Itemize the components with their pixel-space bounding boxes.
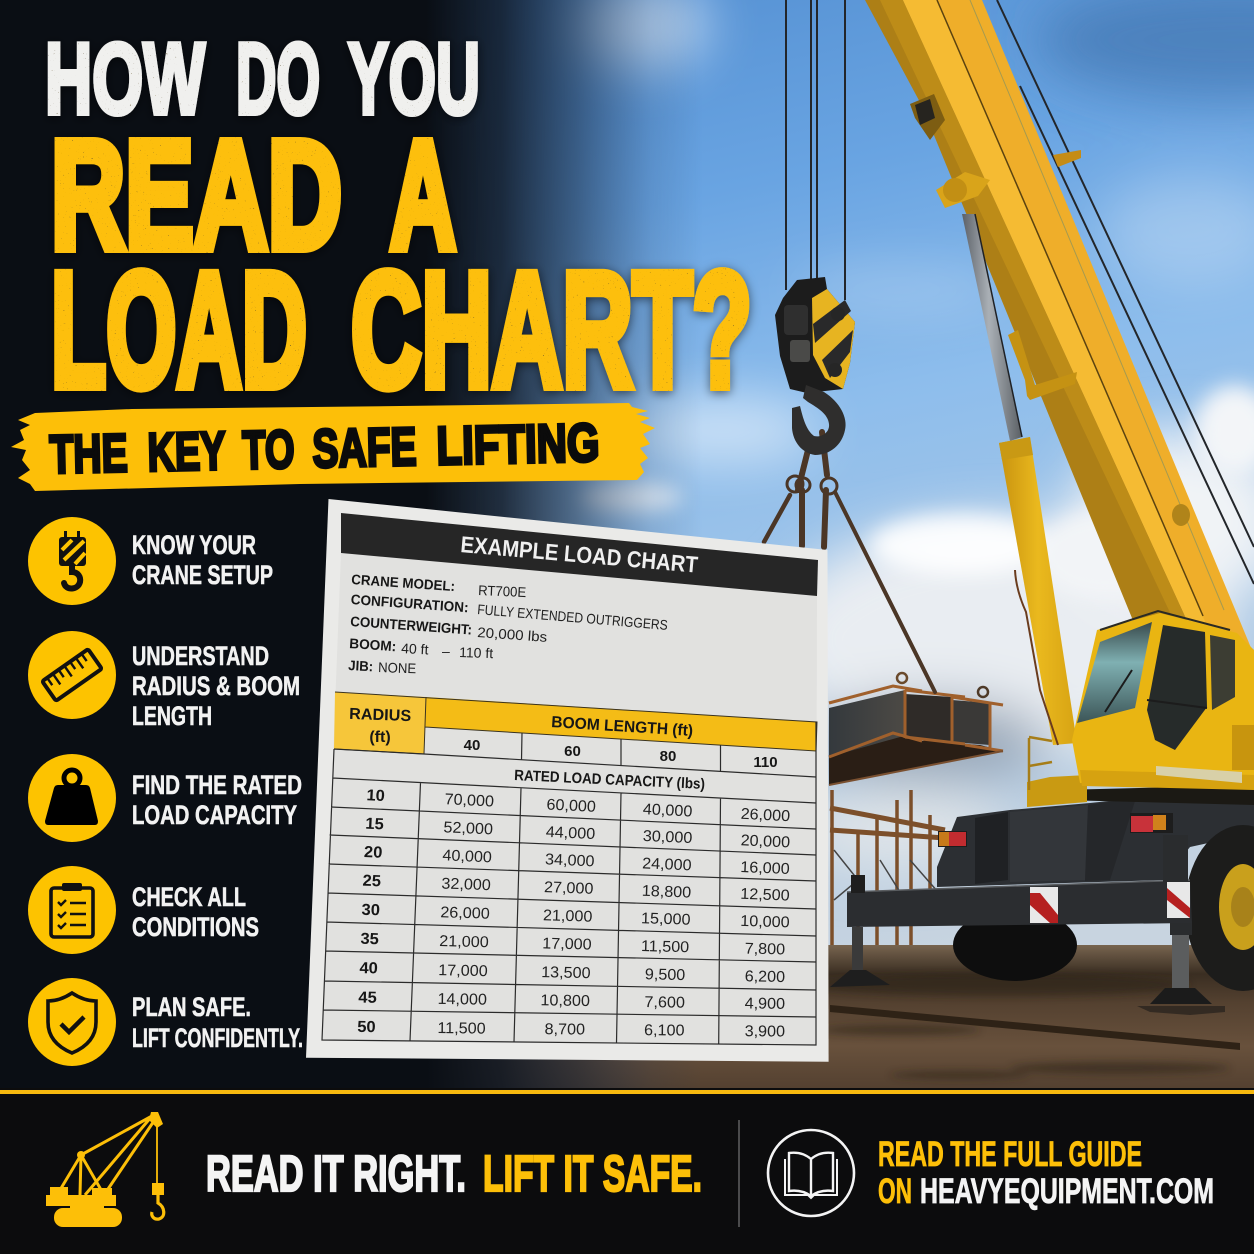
boom 40 column: 26,000 — [440, 904, 490, 923]
boom 80 column: 24,000 — [642, 856, 692, 874]
table grid — [322, 722, 816, 1045]
rear tire — [953, 909, 1077, 981]
boom 110 column: 3,900 — [745, 1023, 785, 1040]
step 4: check all conditions: CONDITIONS — [132, 912, 259, 942]
boom 40 column: 52,000 — [443, 819, 493, 838]
boom 80 column: 30,000 — [642, 828, 693, 847]
cab — [1072, 611, 1254, 790]
crane specifications: CRANE MODEL: — [351, 571, 456, 594]
boom 80 column: 7,600 — [644, 994, 685, 1012]
footer slogan: READ IT RIGHT. — [206, 1145, 466, 1202]
crane specifications: BOOM: — [349, 635, 397, 654]
title line: load chart?: CHART? — [351, 238, 752, 421]
table header: BOOM LENGTH (ft) — [551, 714, 694, 740]
boom 110 column: 26,000 — [740, 806, 791, 825]
hydraulic cylinder — [962, 214, 1077, 745]
chart header band — [341, 513, 818, 596]
boom 40 column: 21,000 — [439, 933, 489, 951]
boom 60 column: 17,000 — [542, 936, 592, 954]
title line: how do you: YOU — [348, 24, 480, 136]
chart inner area — [322, 553, 817, 1045]
footer call to action: ON — [878, 1172, 912, 1211]
boom 40 column: 11,500 — [437, 1020, 486, 1037]
crane boom — [865, 0, 1254, 655]
step 3: find the rated load capacity — [28, 754, 302, 842]
boom 80 column — [641, 801, 693, 1039]
boom 60 column: 60,000 — [546, 797, 596, 816]
step 2: understand radius and boom length: RADIUS & BOOM — [132, 671, 300, 701]
subtitle text: TO — [242, 420, 295, 481]
outrigger beam — [847, 880, 1192, 927]
boom 60 column — [540, 797, 596, 1038]
radius column: 30 — [361, 901, 380, 919]
step 3: find the rated load capacity: FIND THE RATED — [132, 770, 302, 800]
crane truck — [830, 611, 1254, 1015]
subtitle text: KEY — [147, 421, 226, 483]
boom 60 column: 21,000 — [543, 907, 593, 926]
crane specifications: CONFIGURATION: — [350, 591, 469, 615]
boom 110 column: 4,900 — [745, 996, 785, 1013]
bottom bar — [0, 1088, 1254, 1254]
icon: open book in circle — [768, 1130, 854, 1216]
panel: steps list — [28, 517, 303, 1066]
boom 110 column: 12,500 — [740, 886, 790, 904]
railing — [1029, 737, 1052, 790]
icon: clipboard checklist — [51, 883, 93, 937]
background steel structure — [830, 790, 945, 945]
step 1: know your crane setup: CRANE SETUP — [132, 560, 273, 590]
subtitle text: SAFE — [312, 417, 417, 479]
crane specifications — [348, 571, 668, 676]
boom 110 column: 7,800 — [744, 941, 786, 958]
boom 60 column: 8,700 — [544, 1021, 585, 1038]
boom 40 column: 70,000 — [444, 791, 495, 810]
radius column — [357, 786, 385, 1036]
rigging chains — [764, 432, 935, 692]
table header: 40 — [464, 737, 480, 754]
icon: boom clamp bracket top — [910, 94, 990, 208]
step 4: check all conditions — [28, 866, 259, 954]
radius column: 50 — [357, 1018, 376, 1036]
crane specifications: – — [442, 643, 450, 659]
crane wire ropes — [786, 0, 1254, 584]
table header: (ft) — [369, 729, 391, 746]
title line: load chart? — [51, 238, 752, 421]
subtitle brush banner — [11, 403, 655, 491]
boom 40 column: 17,000 — [438, 962, 488, 980]
boom 40 column — [437, 791, 495, 1037]
ground — [300, 945, 1254, 1090]
boom 110 column: 10,000 — [740, 913, 790, 931]
title line: how do you: DO — [236, 24, 320, 136]
step 2: understand radius and boom length: UNDERSTAND — [132, 641, 269, 671]
front tire — [1185, 825, 1254, 991]
title line: read a: READ — [51, 109, 342, 281]
step 5: plan safe lift confidently: LIFT CONFIDENTLY. — [132, 1023, 303, 1053]
chart header band: EXAMPLE LOAD CHART — [460, 531, 699, 578]
boom 80 column: 40,000 — [642, 801, 693, 820]
title line: how do you — [45, 24, 480, 136]
boom 80 column: 15,000 — [641, 910, 691, 929]
crane specifications: RT700E — [478, 582, 527, 600]
crane specifications: COUNTERWEIGHT: — [350, 613, 473, 638]
step 4: check all conditions: CHECK ALL — [132, 882, 246, 912]
footer content — [46, 1112, 1214, 1227]
subtitle text: THE — [49, 423, 128, 485]
boom 80 column: 11,500 — [641, 938, 690, 956]
boom pin — [1053, 150, 1081, 167]
radius column: 20 — [364, 843, 383, 862]
jack stand right — [1137, 835, 1225, 1015]
crane specifications: FULLY EXTENDED OUTRIGGERS — [477, 601, 668, 633]
hook block — [775, 277, 855, 393]
boom 60 column: 10,800 — [540, 992, 590, 1010]
radius column: 10 — [366, 786, 385, 805]
crane specifications: 20,000 lbs — [477, 624, 548, 645]
boom 60 column: 34,000 — [545, 852, 595, 870]
step 1: know your crane setup — [28, 517, 273, 605]
icon: shield check — [48, 993, 96, 1053]
table header — [334, 692, 817, 793]
hook — [792, 385, 846, 455]
step 2: understand radius and boom length: LENGTH — [132, 701, 212, 731]
boom 80 column: 6,100 — [644, 1022, 685, 1039]
boom 60 column: 13,500 — [541, 964, 591, 982]
steel I-beam load — [829, 673, 1003, 785]
jack stand left — [830, 875, 890, 987]
subtitle text: LIFTING — [436, 413, 600, 476]
radius column: 45 — [358, 989, 377, 1007]
table header: 80 — [660, 748, 676, 765]
footer slogan: LIFT IT SAFE. — [483, 1145, 702, 1202]
step 5: plan safe lift confidently — [28, 978, 303, 1066]
tail lights — [938, 813, 1173, 847]
chart card — [306, 499, 829, 1062]
icon: crane silhouette — [46, 1112, 164, 1227]
boom 60 column: 27,000 — [544, 879, 594, 898]
ground plank — [830, 1005, 1240, 1050]
table header: 110 — [753, 754, 778, 771]
icon: crane hook — [59, 531, 86, 589]
step 5: plan safe lift confidently: PLAN SAFE. — [132, 992, 251, 1022]
title line: read a: A — [390, 109, 456, 281]
crane specifications: 110 ft — [459, 644, 494, 661]
radius column: 40 — [359, 959, 378, 977]
reflective chevrons — [1030, 882, 1190, 923]
table values — [357, 786, 791, 1040]
truck body — [937, 795, 1254, 887]
boom 80 column: 18,800 — [641, 883, 692, 901]
title line: how do you: HOW — [45, 24, 205, 136]
boom 110 column — [740, 806, 791, 1040]
title line: load chart?: LOAD — [51, 238, 307, 421]
chassis yellow base — [1027, 775, 1087, 807]
icon: ruler — [42, 649, 102, 701]
boom 40 column: 32,000 — [441, 876, 491, 894]
crane specifications: JIB: — [348, 657, 374, 674]
boom 40 column: 14,000 — [437, 991, 487, 1009]
boom 110 column: 20,000 — [740, 832, 791, 851]
boom 110 column: 6,200 — [744, 968, 785, 986]
subtitle text — [49, 413, 600, 485]
boom 110 column: 16,000 — [740, 859, 790, 878]
radius column: 25 — [362, 872, 381, 890]
step 3: find the rated load capacity: LOAD CAPACITY — [132, 800, 297, 830]
radius column: 15 — [365, 815, 384, 833]
panel: example load chart — [306, 499, 829, 1062]
title — [45, 24, 752, 421]
boom 80 column: 9,500 — [645, 966, 686, 984]
icon: weight — [45, 770, 98, 825]
footer call to action — [878, 1135, 1214, 1211]
boom mid bracket — [1008, 330, 1077, 400]
table header: RATED LOAD CAPACITY (lbs) — [514, 767, 705, 793]
radius column: 35 — [360, 930, 379, 948]
table header: RADIUS — [349, 706, 412, 725]
crane specifications: 40 ft — [401, 640, 429, 657]
step 1: know your crane setup: KNOW YOUR — [132, 530, 256, 560]
boom 40 column: 40,000 — [442, 848, 492, 866]
under cab shadow — [1060, 785, 1254, 805]
clouds — [570, 0, 1254, 870]
boom 60 column: 44,000 — [545, 824, 596, 843]
crane specifications: NONE — [378, 659, 416, 676]
step 2: understand radius and boom length — [28, 631, 300, 731]
table header: 60 — [564, 743, 581, 760]
